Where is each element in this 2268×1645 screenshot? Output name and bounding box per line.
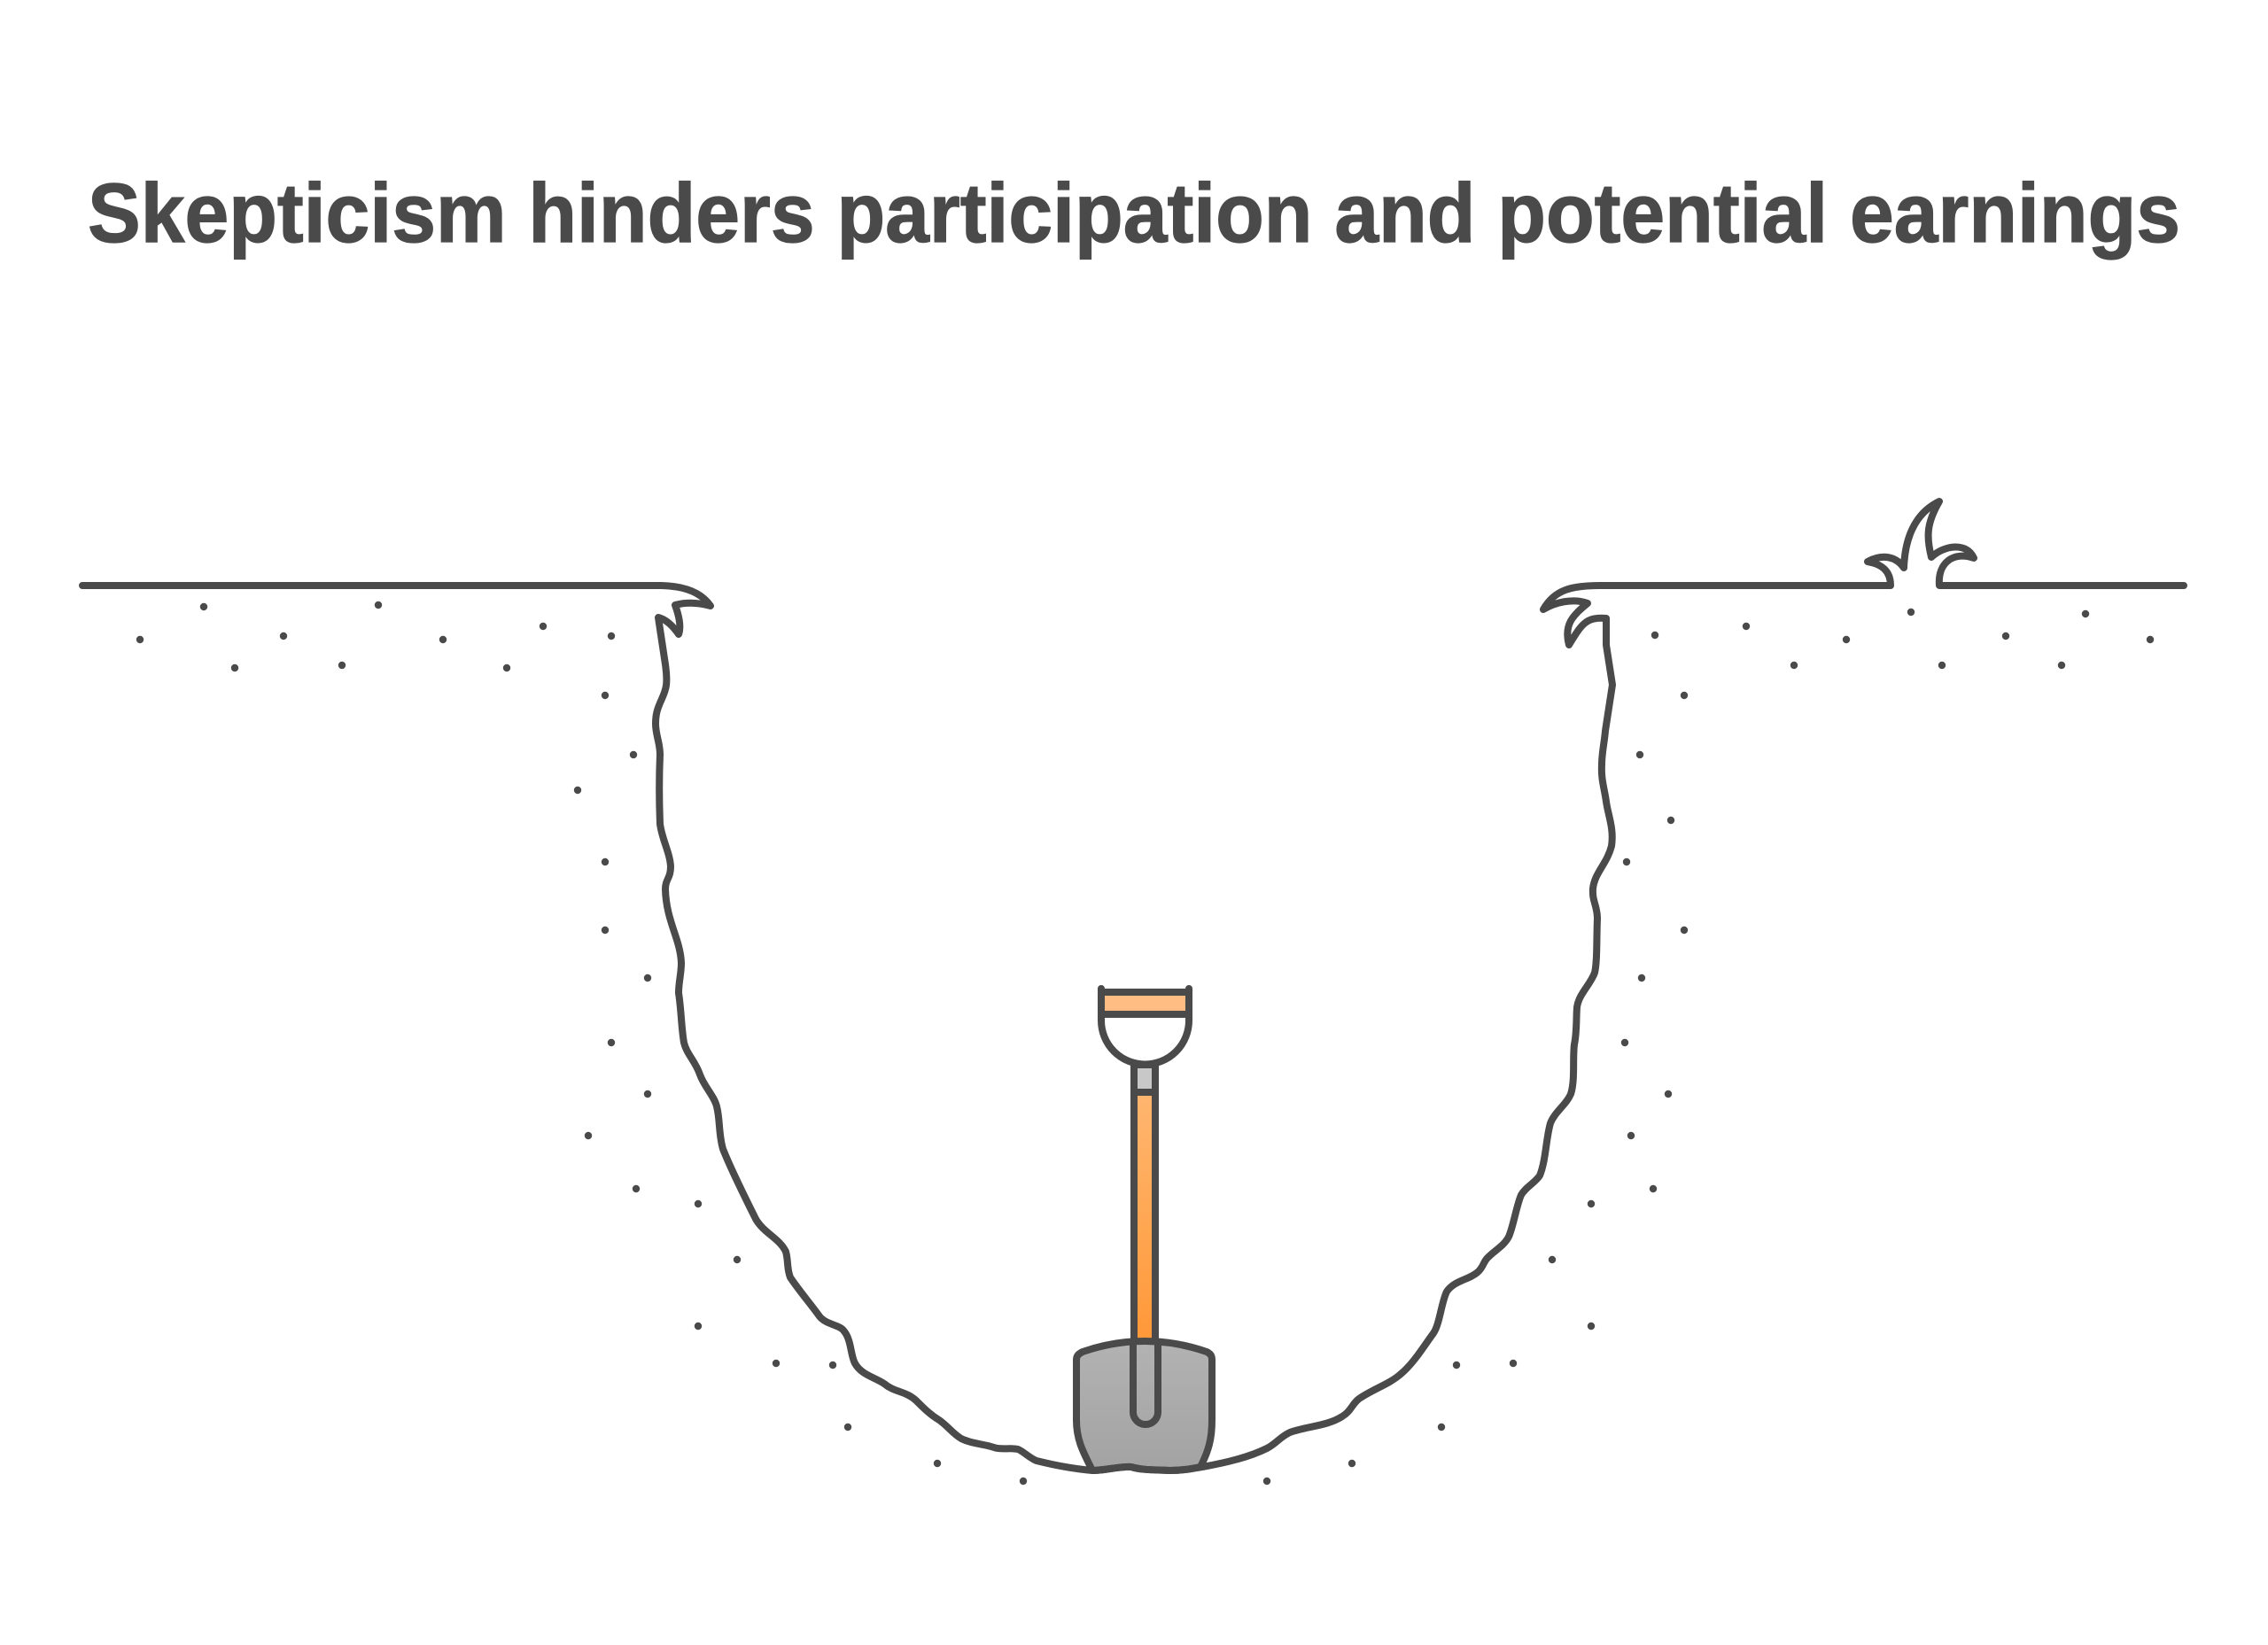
soil dots [136,601,2154,1485]
shovel handle [1134,1065,1155,1342]
shovel blade [1076,1341,1212,1470]
shovel grip [1101,989,1189,1065]
title: Skepticism hinders participation and potential earnings [88,167,2180,260]
ground line and hole outline [82,501,2184,1470]
illustration: shovel standing in a dug hole [82,501,2184,1485]
icon: shovel [1076,989,1212,1470]
